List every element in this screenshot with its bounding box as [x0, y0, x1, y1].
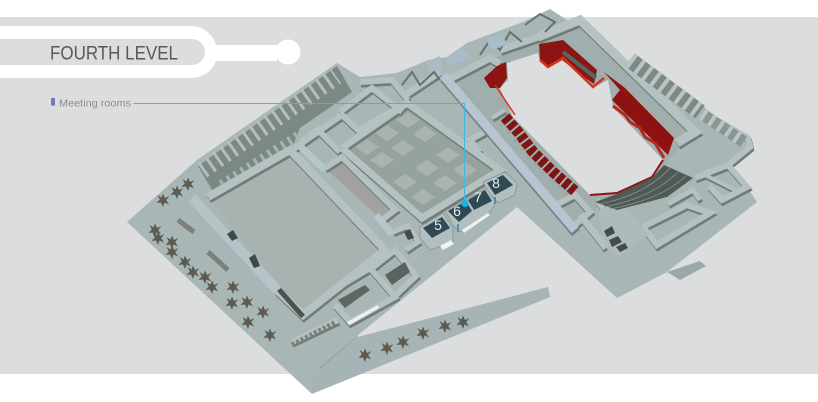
ramp wedge: [312, 287, 550, 394]
title: FOURTH LEVEL: [50, 42, 178, 64]
arena opening: [500, 53, 663, 195]
amphitheatre rows: [600, 168, 686, 209]
skylight: [347, 305, 379, 325]
grid room tiles: [355, 112, 477, 205]
far east annex comb walls: [702, 114, 744, 142]
tables on terrace: [148, 178, 470, 362]
west light band: [192, 198, 277, 290]
east tier: [604, 72, 674, 155]
room boxes: [420, 172, 517, 250]
north-east annex rooms: [402, 14, 555, 85]
south amphitheatre seating: [595, 165, 693, 210]
skylight by room 5: [440, 240, 454, 250]
east annex comb ridges: [630, 60, 700, 112]
arena red seating: [484, 40, 674, 196]
detached ramp fragment: [667, 261, 706, 280]
hall east band south part: [376, 215, 392, 234]
legend swatch: [51, 98, 55, 106]
north-west balcony: [484, 62, 507, 88]
north balcony bright edge: [540, 58, 604, 87]
north rooms, comb walls row two: [222, 136, 300, 186]
legend item: meeting rooms: [51, 98, 131, 110]
walls shadow: [209, 22, 751, 344]
floor slab: [127, 9, 757, 394]
header shape: [0, 26, 300, 78]
long east corridor top: [443, 75, 575, 230]
arena rim: [590, 160, 663, 195]
arena surround floor: [443, 20, 695, 225]
far east annex comb ridges: [702, 114, 744, 142]
leader line: [134, 104, 464, 203]
pill outline: [0, 26, 277, 78]
skylight by rooms 6 and 7: [462, 213, 490, 233]
blue-tinted roof panels: [426, 34, 508, 72]
east annex comb walls: [630, 60, 700, 112]
west balcony strip: [495, 85, 515, 115]
north rooms band: [198, 66, 352, 195]
room number 7: 7: [474, 189, 482, 205]
west band stair openings: [227, 230, 260, 268]
south hall dark opening: [277, 288, 305, 318]
west tier column tops: [501, 124, 568, 196]
meeting rooms 5 to 8: [420, 172, 517, 250]
room interiors: [423, 175, 513, 238]
room number 5: 5: [434, 217, 442, 233]
building model: [127, 9, 757, 394]
benches on terrace: [178, 220, 336, 345]
legend label: Meeting rooms: [59, 98, 131, 110]
south service rooms: [338, 226, 628, 308]
room number 8: 8: [492, 175, 500, 191]
long east corridor: [444, 78, 576, 233]
room number 6: 6: [453, 203, 461, 219]
hall east band: [300, 146, 325, 170]
leader dot: [461, 200, 469, 207]
north rooms, comb walls row one: [202, 76, 336, 170]
south lobby block: [598, 197, 648, 256]
east tier steps: [613, 106, 664, 158]
large hall floor: [208, 150, 385, 315]
grid room floor: [342, 103, 500, 218]
side rooms floor: [325, 157, 395, 220]
north balcony: [539, 40, 597, 84]
connector dot: [276, 40, 300, 64]
balcony seats: [563, 52, 596, 78]
west tier: [505, 117, 576, 192]
gap shadow under slab edge: [320, 336, 358, 368]
walls: [208, 20, 750, 342]
blue seams between rooms: [458, 197, 495, 232]
